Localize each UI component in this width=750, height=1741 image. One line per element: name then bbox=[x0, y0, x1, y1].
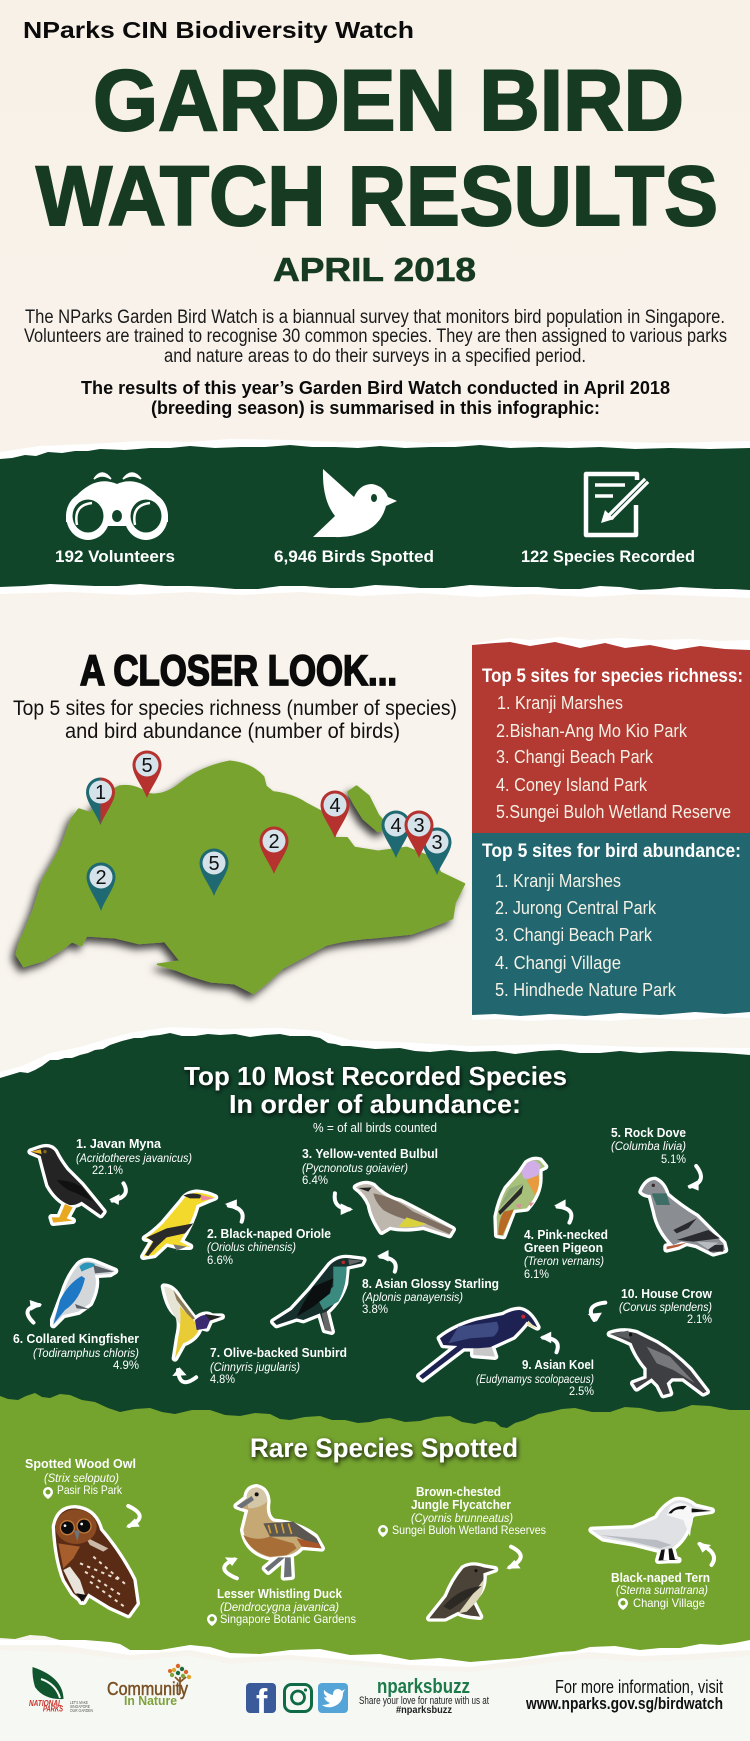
logo: National Parks: NATIONAL bbox=[29, 1699, 62, 1708]
label: Asian Koel: 2.5% bbox=[569, 1384, 594, 1398]
label: Black-naped Oriole bbox=[207, 1226, 331, 1267]
bird: House Crow bbox=[610, 1331, 707, 1395]
map pin: abundance 4 bbox=[382, 810, 410, 858]
bird: Yellow-vented Bulbul bbox=[356, 1184, 453, 1235]
footer background bbox=[0, 1650, 750, 1741]
label: House Crow: 2.1% bbox=[687, 1312, 712, 1326]
label: Brown-chested Jungle Flycatcher: Brown-chested bbox=[416, 1484, 501, 1499]
bird: Olive-backed Sunbird bbox=[164, 1287, 222, 1358]
label: Collared Kingfisher bbox=[13, 1331, 139, 1372]
intro paragraph: and nature areas to do their surveys in a specified period. bbox=[164, 346, 586, 367]
label: Black-naped Oriole: (Oriolus chinensis) bbox=[207, 1240, 296, 1254]
label: Rock Dove: 5.1% bbox=[661, 1152, 686, 1166]
section title: In order of abundance: bbox=[229, 1089, 521, 1119]
panel: rare species bbox=[0, 1393, 750, 1667]
label: Asian Glossy Starling bbox=[362, 1276, 499, 1316]
label: Brown-chested Jungle Flycatcher: Sungei Buloh Wetland Reserves bbox=[392, 1523, 546, 1537]
panel torn edge bbox=[472, 1000, 750, 1021]
label: House Crow: (Corvus splendens) bbox=[619, 1300, 712, 1314]
section description: Top 5 sites for species richness (number of species) bbox=[13, 697, 457, 720]
panel: key stats band bbox=[0, 439, 750, 598]
panel torn edge bbox=[472, 637, 750, 660]
bird: Spotted Wood Owl bbox=[55, 1508, 137, 1615]
label: Collared Kingfisher: 4.9% bbox=[113, 1358, 139, 1372]
panel: top 5 bird abundance bbox=[472, 833, 750, 1021]
social handle: nparksbuzz bbox=[377, 1676, 470, 1698]
label: Pink-necked Green Pigeon: 6.1% bbox=[524, 1267, 549, 1281]
social handle bbox=[359, 1676, 489, 1716]
panel: top 10 species bbox=[0, 1027, 750, 1440]
panel: a closer look bbox=[13, 647, 464, 993]
map pin: abundance 2 bbox=[86, 862, 116, 911]
label: Collared Kingfisher: (Todiramphus chloris) bbox=[33, 1346, 139, 1360]
map pin: both rank 1 bbox=[86, 778, 115, 825]
label: Asian Glossy Starling: 8. Asian Glossy Starling bbox=[362, 1276, 499, 1291]
section title bbox=[184, 1061, 567, 1119]
bird: Collared Kingfisher bbox=[53, 1261, 115, 1325]
section title: Top 10 Most Recorded Species bbox=[184, 1061, 567, 1091]
label: Olive-backed Sunbird: (Cinnyris jugularis) bbox=[210, 1360, 300, 1374]
dark green background bbox=[0, 1033, 750, 1440]
map pin: abundance 3: 3 bbox=[431, 832, 443, 854]
abundance list: 3. Changi Beach Park bbox=[495, 925, 653, 945]
label: Asian Glossy Starling: (Aplonis panayensis) bbox=[362, 1290, 463, 1304]
title line 1: GARDEN BIRD bbox=[93, 53, 684, 149]
abundance list: 2. Jurong Central Park bbox=[495, 898, 657, 918]
label: Spotted Wood Owl: Pasir Ris Park bbox=[57, 1483, 123, 1497]
label: Yellow-vented Bulbul: 6.4% bbox=[302, 1173, 328, 1187]
logo: National Parks: OUR GARDEN bbox=[70, 1708, 93, 1713]
map pin: abundance 2: 2 bbox=[95, 867, 107, 889]
icon: Instagram bbox=[284, 1684, 312, 1712]
label: Black-naped Oriole: 2. Black-naped Oriole bbox=[207, 1226, 331, 1241]
birds artwork: right group bbox=[356, 1160, 725, 1395]
band background bbox=[0, 445, 750, 590]
label: House Crow: 10. House Crow bbox=[621, 1286, 713, 1301]
stat: volunteers: 192 Volunteers bbox=[55, 547, 175, 566]
bird: Lesser Whistling Duck bbox=[237, 1487, 322, 1577]
label: Rock Dove: 5. Rock Dove bbox=[611, 1125, 686, 1140]
summary statement: The results of this year’s Garden Bird Watch conducted in April 2018 bbox=[81, 377, 670, 398]
bird: Black-naped Tern bbox=[592, 1500, 712, 1561]
bird: Asian Koel bbox=[419, 1310, 537, 1379]
label: Collared Kingfisher: 6. Collared Kingfisher bbox=[13, 1331, 139, 1346]
label: Yellow-vented Bulbul: 3. Yellow-vented Bulbul bbox=[302, 1146, 438, 1161]
map of Singapore bbox=[17, 761, 464, 993]
date subtitle: APRIL 2018 bbox=[273, 251, 476, 288]
label: Black-naped Tern: Changi Village bbox=[633, 1596, 705, 1610]
map pin: richness 5 bbox=[132, 750, 162, 798]
label: Olive-backed Sunbird: 7. Olive-backed Sunbird bbox=[210, 1345, 347, 1360]
richness list: 4. Coney Island Park bbox=[496, 775, 648, 795]
map pin: abundance 3 bbox=[422, 828, 452, 875]
birds artwork: left group bbox=[31, 1147, 363, 1358]
map pin: richness 4: 4 bbox=[329, 795, 341, 817]
label: Olive-backed Sunbird bbox=[210, 1345, 347, 1386]
label: Spotted Wood Owl: Spotted Wood Owl bbox=[25, 1456, 136, 1471]
label: Rock Dove: (Columba livia) bbox=[611, 1139, 686, 1153]
label: Black-naped Tern bbox=[611, 1570, 710, 1610]
section heading: A CLOSER LOOK... bbox=[80, 647, 397, 695]
label: Brown-chested Jungle Flycatcher: Jungle Flycatcher bbox=[411, 1497, 511, 1512]
label: Asian Koel: (Eudynamys scolopaceus) bbox=[476, 1372, 594, 1386]
logo: National Parks: LET'S MAKE bbox=[70, 1700, 88, 1705]
bird: Brown-chested Jungle Flycatcher bbox=[429, 1566, 495, 1618]
label: Brown-chested Jungle Flycatcher bbox=[378, 1484, 546, 1537]
footer white edge bbox=[0, 1640, 750, 1667]
label: Lesser Whistling Duck: Singapore Botanic Gardens bbox=[220, 1612, 356, 1626]
bird: Black-naped Oriole bbox=[143, 1193, 215, 1257]
label: Javan Myna: 22.1% bbox=[92, 1163, 123, 1177]
arrows: rare species bbox=[126, 1506, 714, 1578]
logo: National Parks: PARKS bbox=[43, 1704, 63, 1714]
icon: Facebook: f bbox=[256, 1683, 268, 1721]
social handle: Share your love for nature with us at bbox=[359, 1695, 489, 1707]
icon: binoculars bbox=[66, 473, 168, 540]
torn edge white bbox=[0, 439, 750, 598]
panel: footer bbox=[0, 1650, 750, 1741]
stat: birds spotted: 6,946 Birds Spotted bbox=[274, 547, 434, 566]
label: Pink-necked Green Pigeon: Green Pigeon bbox=[524, 1240, 603, 1255]
logo: National Parks: SINGAPORE bbox=[70, 1704, 90, 1709]
torn edge white bbox=[0, 1027, 750, 1080]
richness list: 2.Bishan-Ang Mo Kio Park bbox=[496, 721, 688, 741]
label: Pink-necked Green Pigeon bbox=[524, 1227, 608, 1281]
icon: Facebook bbox=[246, 1683, 276, 1721]
label: Yellow-vented Bulbul bbox=[302, 1146, 438, 1187]
map pin: richness 4 bbox=[320, 790, 350, 838]
title line 2: WATCH RESULTS bbox=[36, 149, 718, 243]
label: Olive-backed Sunbird: 4.8% bbox=[210, 1372, 235, 1386]
abundance list: 5. Hindhede Nature Park bbox=[495, 980, 677, 1000]
map pin: richness 3: 3 bbox=[413, 815, 425, 837]
logo: National Parks bbox=[29, 1667, 93, 1714]
label: Pink-necked Green Pigeon: 4. Pink-necked bbox=[524, 1227, 608, 1242]
website callout bbox=[525, 1677, 723, 1713]
label: House Crow bbox=[619, 1286, 713, 1326]
summary statement bbox=[81, 377, 670, 418]
kicker text: NParks CIN Biodiversity Watch bbox=[23, 17, 414, 43]
section title: Rare Species Spotted bbox=[250, 1433, 518, 1463]
label: Lesser Whistling Duck: Lesser Whistling Duck bbox=[217, 1586, 343, 1601]
rare birds artwork: right bbox=[429, 1500, 712, 1618]
label: Javan Myna bbox=[76, 1136, 192, 1177]
logo: Community in Nature bbox=[107, 1664, 191, 1708]
stat: species recorded: 122 Species Recorded bbox=[521, 547, 695, 566]
label: Black-naped Oriole: 6.6% bbox=[207, 1253, 233, 1267]
bird: Rock Dove bbox=[642, 1180, 725, 1253]
teal background bbox=[472, 833, 750, 1016]
label: Asian Glossy Starling: 3.8% bbox=[362, 1302, 388, 1316]
logo: Community in Nature: In Nature bbox=[124, 1693, 177, 1708]
summary statement: (breeding season) is summarised in this infographic: bbox=[151, 397, 600, 418]
label: Asian Koel bbox=[476, 1357, 594, 1398]
richness list: 3. Changi Beach Park bbox=[496, 747, 654, 767]
social handle: #nparksbuzz bbox=[396, 1705, 452, 1716]
label: Black-naped Tern: (Sterna sumatrana) bbox=[616, 1583, 708, 1597]
logo: Community in Nature: Community bbox=[107, 1679, 188, 1699]
map pin: abundance 4: 4 bbox=[390, 815, 402, 837]
map pin: richness 3 bbox=[404, 810, 434, 858]
light green background bbox=[0, 1393, 750, 1662]
section description: and bird abundance (number of birds) bbox=[65, 720, 400, 743]
label: Javan Myna: 1. Javan Myna bbox=[76, 1136, 162, 1151]
bird: Asian Glossy Starling bbox=[273, 1258, 363, 1332]
map pin: both rank 1: 1 bbox=[95, 782, 106, 804]
label: Black-naped Tern: Black-naped Tern bbox=[611, 1570, 710, 1585]
richness list: 1. Kranji Marshes bbox=[497, 693, 623, 713]
abundance list: 1. Kranji Marshes bbox=[495, 871, 621, 891]
icon: bird silhouette bbox=[313, 469, 397, 537]
panel: top 5 species richness bbox=[472, 637, 750, 834]
label: Yellow-vented Bulbul: (Pycnonotus goiavier) bbox=[302, 1161, 408, 1175]
arrows: top 10 species bbox=[28, 1166, 701, 1382]
percent note: % = of all birds counted bbox=[313, 1120, 437, 1135]
abundance list: 4. Changi Village bbox=[495, 953, 621, 973]
bird: Javan Myna bbox=[31, 1147, 103, 1223]
map pin: richness 2: 2 bbox=[268, 831, 280, 853]
map pin: abundance 5 bbox=[200, 848, 228, 896]
bird: Pink-necked Green Pigeon bbox=[497, 1160, 545, 1236]
richness list bbox=[496, 693, 731, 822]
label: Javan Myna: (Acridotheres javanicus) bbox=[76, 1151, 192, 1165]
label: Spotted Wood Owl bbox=[25, 1456, 136, 1499]
label: Spotted Wood Owl: (Strix seloputo) bbox=[44, 1471, 119, 1485]
label: Lesser Whistling Duck bbox=[207, 1586, 356, 1626]
icon: notepad and pencil bbox=[586, 474, 650, 535]
abundance list bbox=[495, 871, 677, 1000]
red background bbox=[472, 642, 750, 834]
section description bbox=[13, 697, 457, 743]
label: Rock Dove bbox=[611, 1125, 686, 1166]
intro paragraph bbox=[24, 307, 727, 367]
label: Asian Koel: 9. Asian Koel bbox=[522, 1357, 594, 1372]
rare birds artwork: left bbox=[55, 1487, 322, 1615]
label: Pink-necked Green Pigeon: (Treron vernans) bbox=[524, 1254, 604, 1268]
panel: header bbox=[23, 17, 727, 418]
label: Brown-chested Jungle Flycatcher: (Cyornis brunneatus) bbox=[411, 1511, 513, 1525]
icon: Twitter bbox=[318, 1683, 348, 1713]
map pin: richness 5: 5 bbox=[141, 755, 153, 777]
map pin: abundance 5: 5 bbox=[208, 853, 220, 875]
map pin: richness 2 bbox=[260, 826, 288, 874]
label: Lesser Whistling Duck: (Dendrocygna javanica) bbox=[220, 1600, 339, 1614]
